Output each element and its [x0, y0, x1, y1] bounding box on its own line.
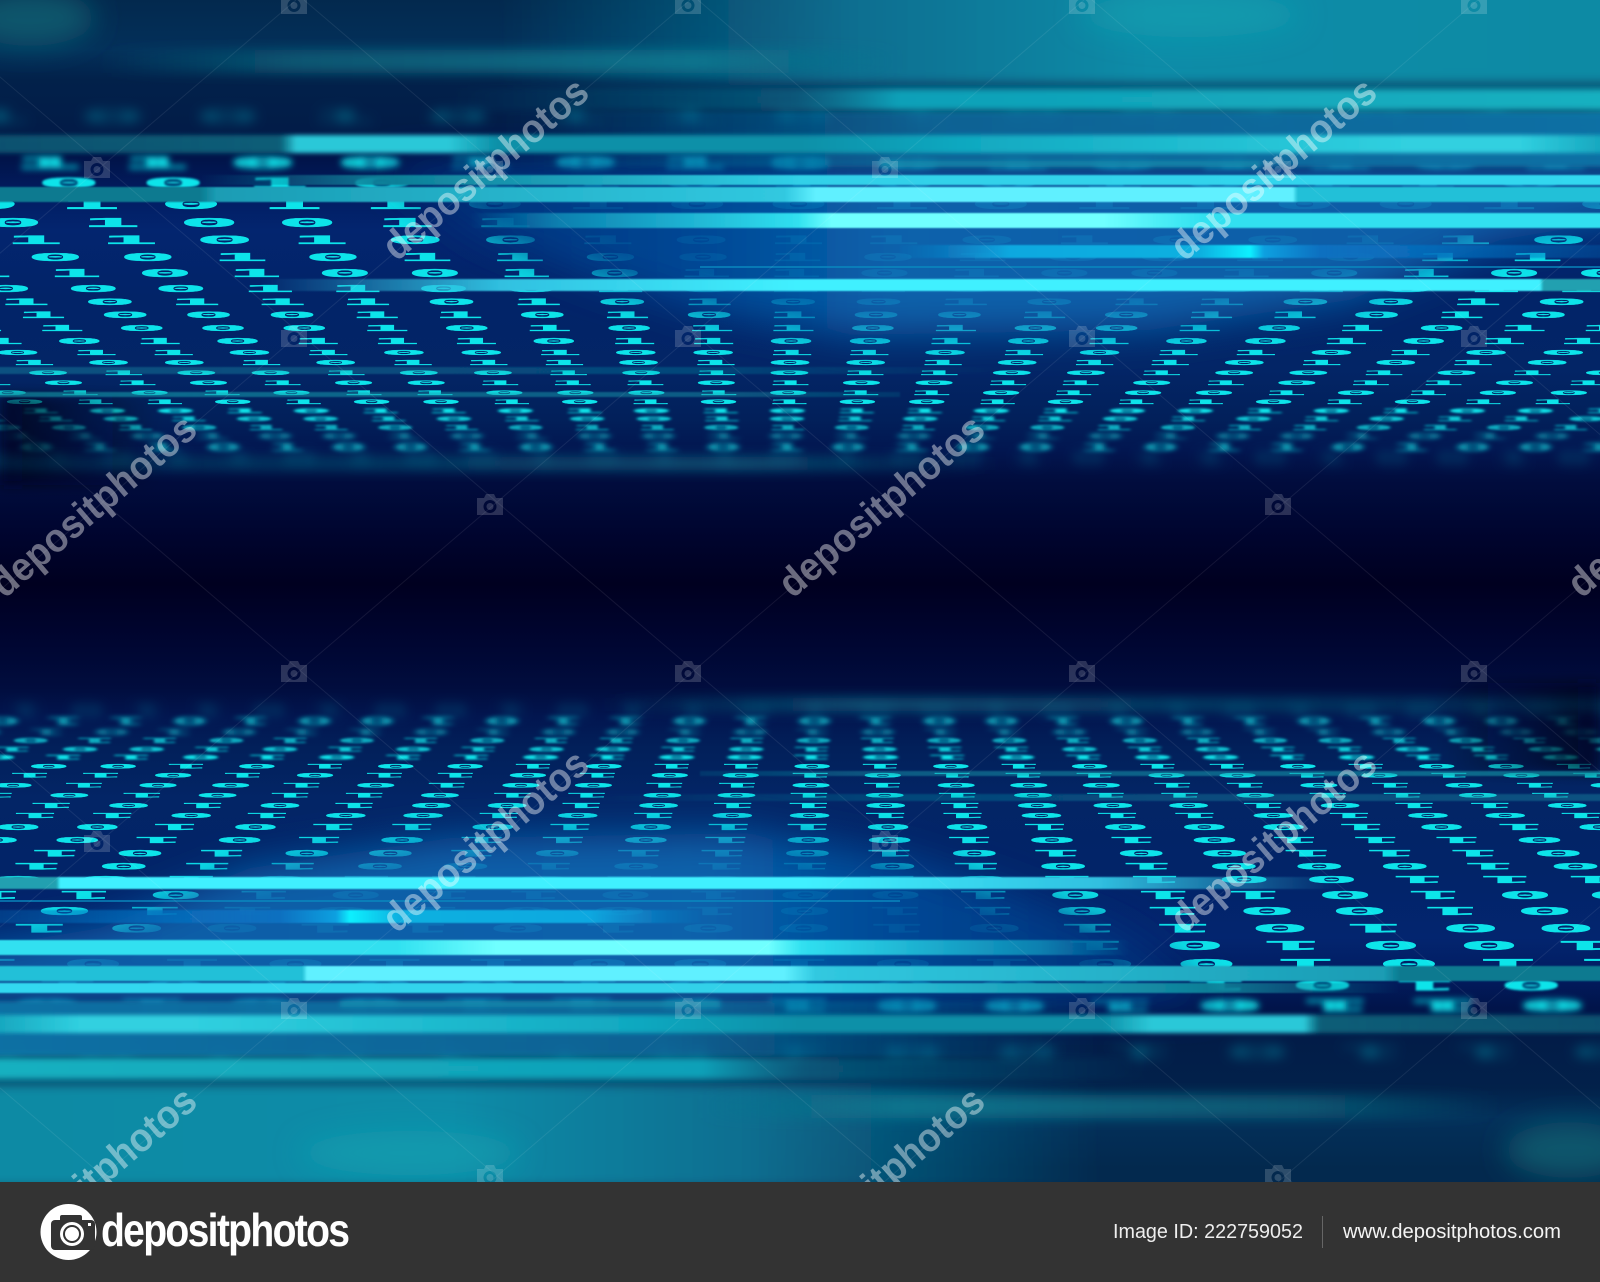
depositphotos diagonal watermarks: depositphotos [1162, 741, 1385, 941]
footer bar [0, 1182, 1600, 1282]
lower binary digit plane [0, 702, 1600, 1061]
footer logo icon: camera in circle [40, 1204, 96, 1260]
footer logo wordmark: depositphotos [101, 1205, 350, 1257]
depositphotos diagonal watermarks: depositphotos [374, 69, 597, 269]
upper light streaks [0, 0, 1600, 485]
lower light streaks [0, 683, 1600, 1188]
depositphotos diagonal watermarks: depositphotos [770, 1078, 993, 1278]
depositphotos diagonal watermarks: depositphotos [770, 406, 993, 606]
website url: www.depositphotos.com [1342, 1221, 1561, 1243]
depositphotos diagonal watermarks: depositphotos [1162, 69, 1385, 269]
depositphotos diagonal watermarks: depositphotos [374, 741, 597, 941]
upper binary digit plane [0, 107, 1600, 466]
image id: Image ID: 222759052 [1113, 1221, 1303, 1243]
